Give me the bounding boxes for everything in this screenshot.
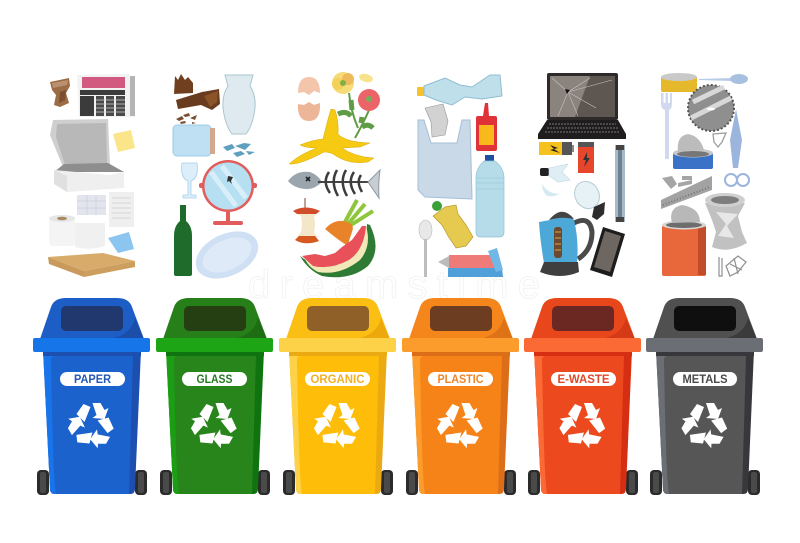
carrot [325, 200, 373, 246]
bin body [166, 350, 264, 494]
bin body [656, 350, 754, 494]
label [428, 372, 493, 386]
recycling symbol [433, 403, 487, 451]
bin lid [531, 298, 635, 339]
bin: paper [33, 298, 150, 495]
brown shards [176, 113, 197, 124]
broken laptop [538, 73, 626, 139]
eggshell [298, 77, 320, 121]
bin: metals [646, 298, 763, 495]
label [60, 372, 125, 386]
wheels [528, 470, 638, 495]
apple core [293, 198, 320, 243]
crushed aluminium can [705, 193, 747, 250]
bin body [534, 350, 632, 494]
bin lid [409, 298, 513, 339]
fluorescent tube [615, 145, 625, 222]
wheels [37, 470, 147, 495]
lid rim [524, 338, 641, 352]
blue glass shards [223, 143, 255, 157]
label [551, 372, 616, 386]
yellow sticky note [113, 130, 135, 152]
broken mirror on stand [199, 160, 257, 225]
broken brown bottle bottom [174, 74, 193, 94]
lid rim [646, 338, 763, 352]
wine glass [182, 163, 197, 198]
banana peel [289, 109, 374, 164]
trash column: plastic waste [417, 75, 504, 277]
label: E-WASTE [558, 374, 610, 386]
water bottle [476, 155, 504, 237]
plastic spoon [419, 220, 432, 277]
yellow flower [332, 72, 374, 94]
paper clips [719, 256, 746, 276]
red glue bottle [476, 103, 497, 151]
recycling symbol [187, 403, 241, 451]
lid rim [156, 338, 273, 352]
newspaper [77, 74, 135, 117]
label: PLASTIC [438, 374, 484, 386]
label [673, 372, 737, 386]
lid slot [61, 306, 123, 331]
trash column: organic waste [288, 72, 380, 277]
lid slot [552, 306, 614, 331]
bin lid [163, 298, 267, 339]
broken brown bottle neck [176, 89, 220, 110]
trash column: metal waste [661, 73, 749, 276]
blue sticky note [108, 232, 134, 253]
recycling symbol [310, 403, 364, 451]
yellow tin can [661, 73, 697, 92]
orange tin can with lid [662, 205, 706, 276]
bin: e-waste [524, 298, 641, 495]
broken energy saving bulb [540, 164, 570, 196]
bin body [43, 350, 141, 494]
label: GLASS [196, 374, 233, 386]
recycling symbol [64, 403, 118, 451]
crushed plastic bottle [417, 75, 502, 105]
lid rim [279, 338, 396, 352]
label: ORGANIC [310, 374, 364, 386]
fish skeleton [288, 170, 380, 198]
glass plate [188, 222, 266, 288]
bin: plastic [402, 298, 519, 495]
metal fork [661, 93, 672, 159]
label [182, 372, 247, 386]
wheels [283, 470, 393, 495]
trash column: glass waste [173, 74, 266, 288]
scissors [725, 109, 749, 186]
watermelon slice [300, 224, 376, 277]
metal spoon [699, 74, 748, 84]
metal ruler [661, 176, 712, 209]
text: dreamstime [248, 263, 540, 307]
lid rim [402, 338, 519, 352]
label: PAPER [74, 374, 112, 386]
trash column: e-waste [538, 73, 626, 277]
circular saw blade [688, 85, 734, 131]
flower stems and leaves [338, 93, 373, 138]
bin body [412, 350, 510, 494]
blue tin can with lid [673, 134, 713, 169]
open cardboard box [50, 119, 124, 192]
paper clip [713, 133, 726, 147]
bin lid [286, 298, 390, 339]
lid slot [307, 306, 369, 331]
red battery [578, 142, 594, 173]
crushed yellow oil bottle [432, 201, 473, 248]
wheels [406, 470, 516, 495]
lid slot [184, 306, 246, 331]
bin lid [653, 298, 757, 339]
glass vase [223, 75, 255, 134]
glass jar [173, 125, 215, 156]
plastic cup crushed [425, 104, 448, 137]
crumpled paper cup [50, 78, 70, 107]
bin: glass [156, 298, 273, 495]
electric kettle [539, 212, 592, 276]
toilet paper roll [49, 215, 105, 249]
label: METALS [682, 374, 728, 386]
toothpaste tube [438, 248, 503, 277]
flat cardboard box [48, 253, 135, 277]
light bulb [570, 177, 605, 220]
lid rim [33, 338, 150, 352]
red flower [358, 89, 380, 111]
bin body [289, 350, 387, 494]
bin lid [40, 298, 144, 339]
green bottle [174, 205, 192, 276]
recycling symbol [555, 403, 610, 451]
lid slot [430, 306, 492, 331]
trash column: paper waste [48, 74, 135, 277]
lid slot [674, 306, 736, 331]
screws [662, 176, 692, 189]
smartphone [590, 227, 625, 277]
wheels [160, 470, 270, 495]
wheels [650, 470, 760, 495]
bin: organic [279, 298, 396, 495]
recycling symbol [677, 403, 732, 451]
plastic bag [418, 120, 472, 199]
paper sheets [77, 192, 134, 227]
yellow battery [539, 142, 574, 155]
